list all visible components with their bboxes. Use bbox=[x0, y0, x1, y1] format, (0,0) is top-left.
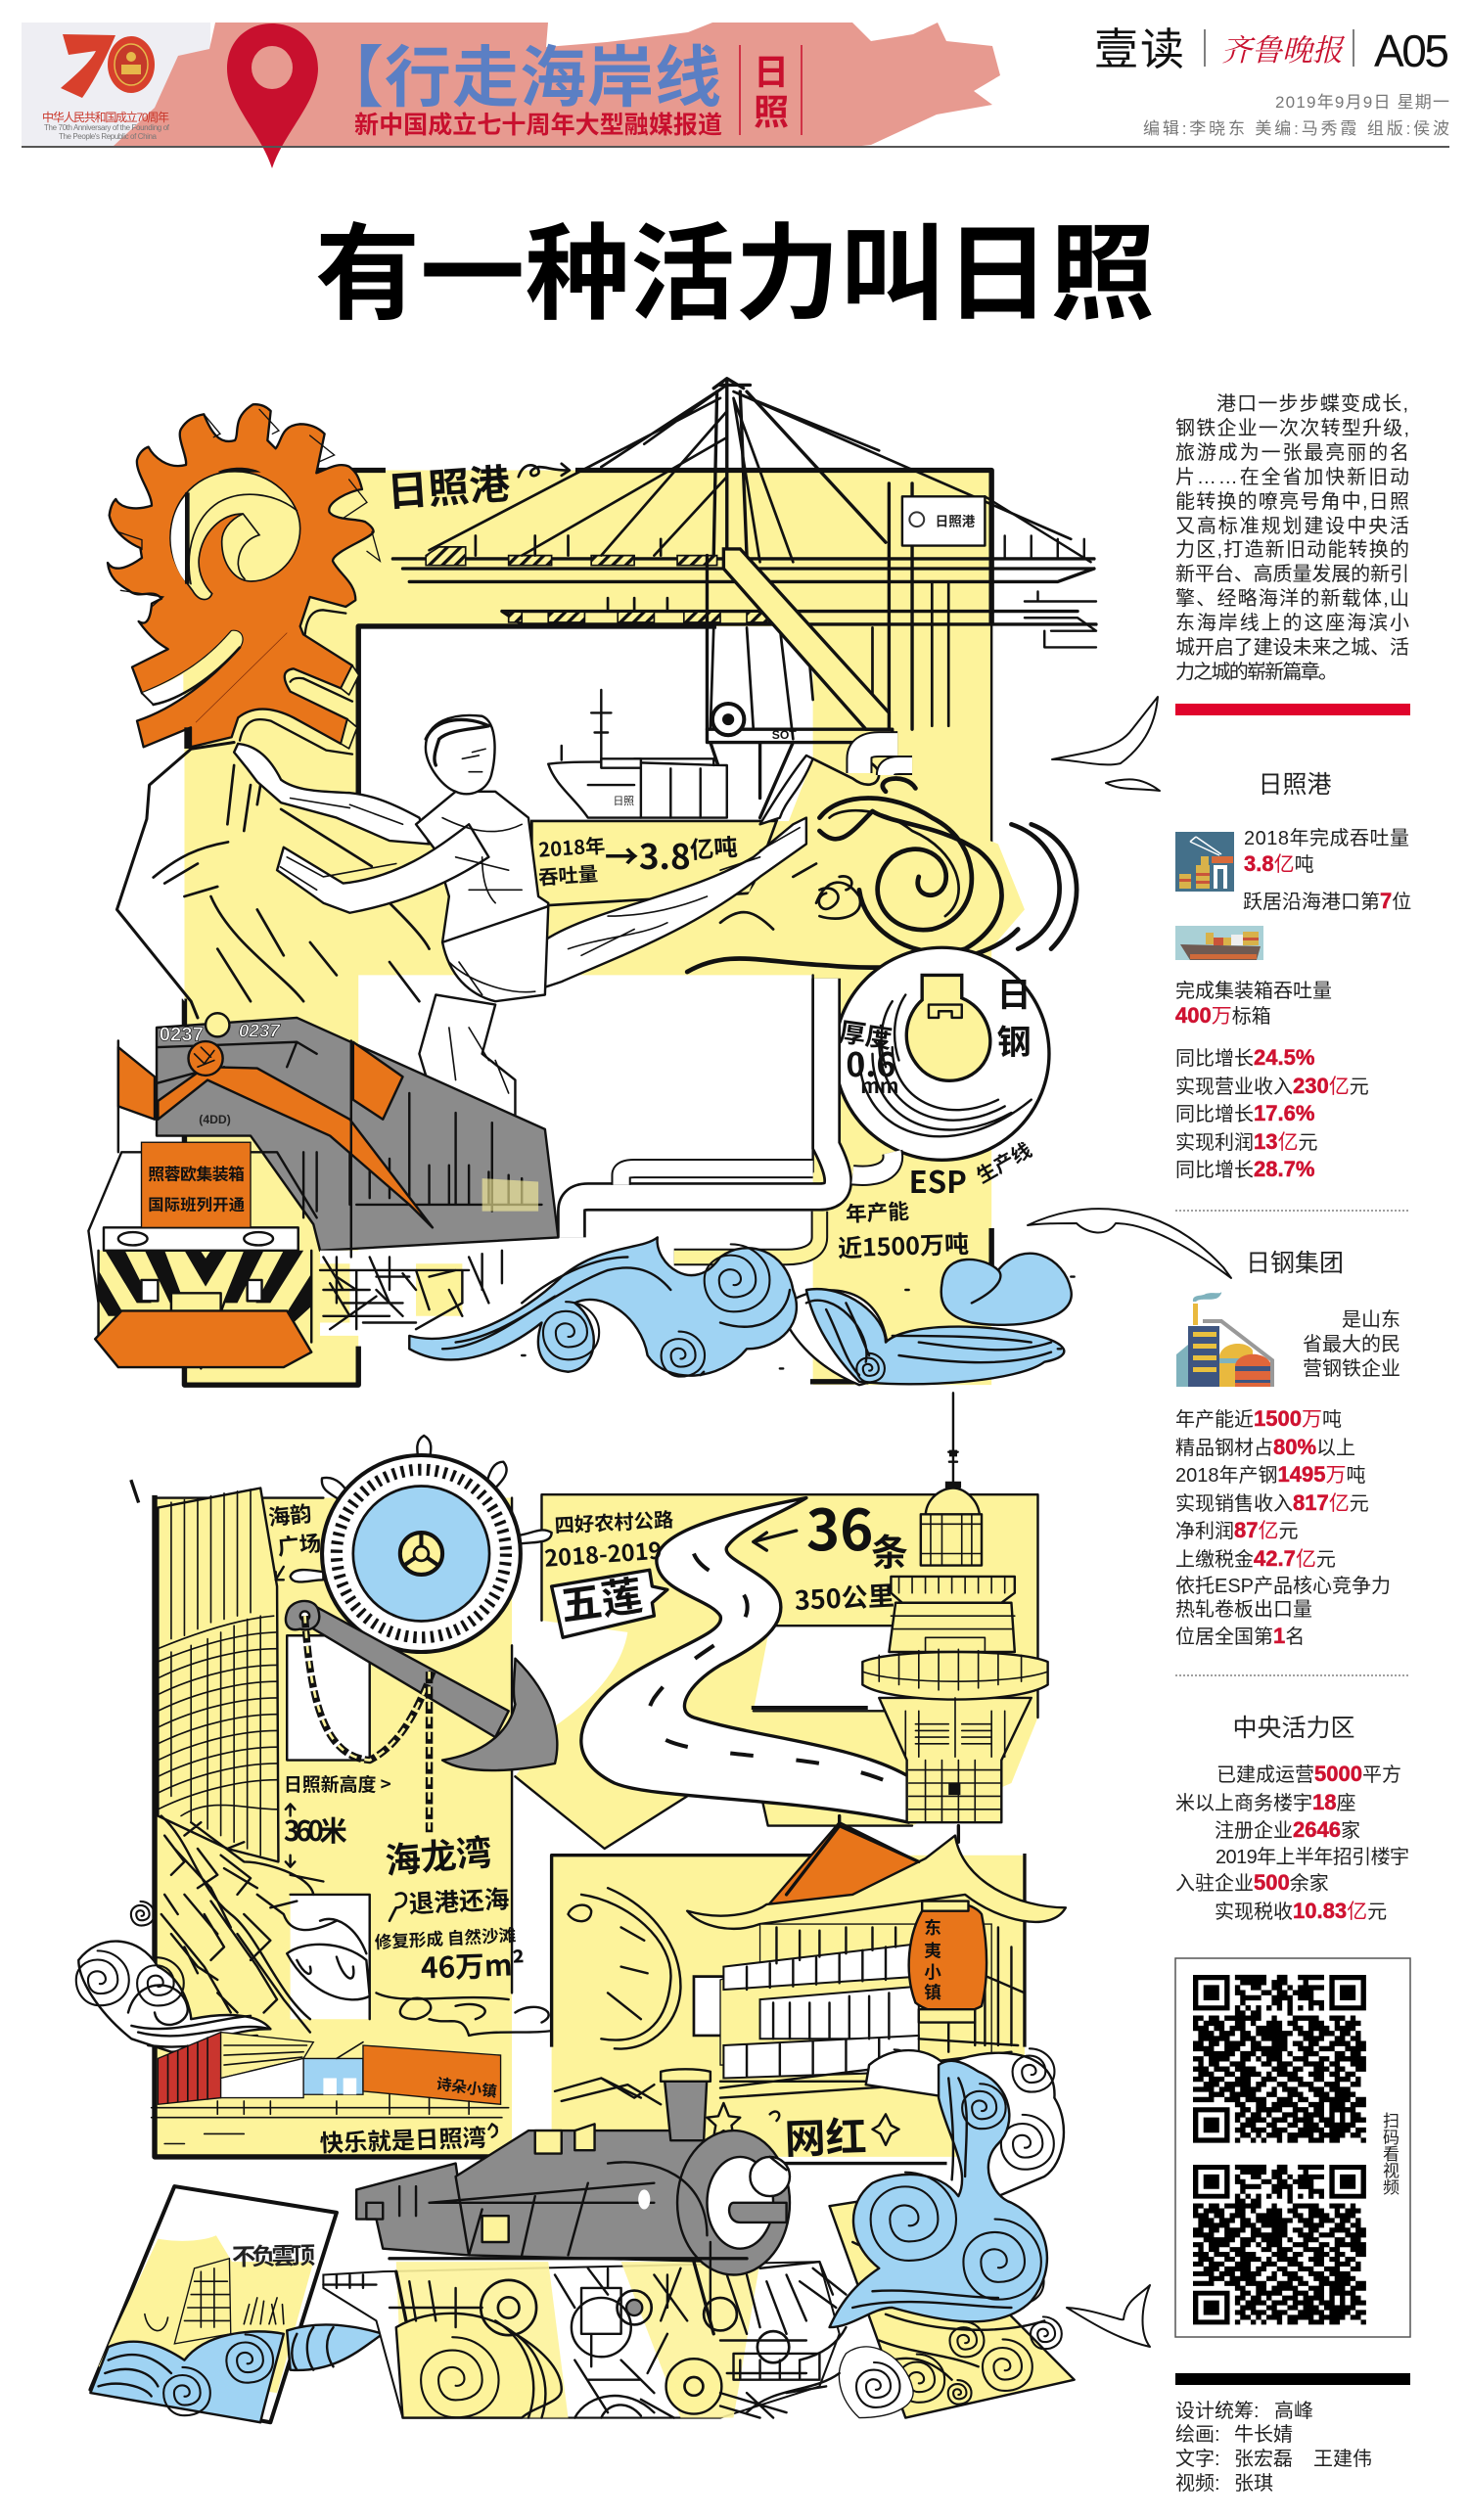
port crane: SOT bbox=[772, 728, 797, 742]
tall tower bbox=[158, 1488, 278, 1861]
road text: 条 bbox=[871, 1523, 908, 1577]
left cloth bbox=[116, 743, 430, 1018]
freight locomotive: 0237 bbox=[239, 1020, 281, 1040]
net-famous label bbox=[707, 2103, 899, 2166]
road text: 350公里 bbox=[794, 1575, 895, 1618]
date and editors bbox=[1143, 93, 1449, 138]
section: Rizhao Steel: 是山东 bbox=[1342, 1308, 1400, 1331]
section: Rizhao Port: 跃居沿海港口第7位 bbox=[1243, 889, 1411, 913]
white pipelines bbox=[572, 745, 912, 1257]
icon: steel factory bbox=[1176, 1292, 1272, 1387]
anchor bbox=[286, 1601, 557, 1832]
intro paragraph: 旅游成为一张最亮丽的名 bbox=[1175, 441, 1409, 464]
main title: 有一种活力叫日照 bbox=[315, 215, 1155, 333]
ESP line labels: 近1500万吨 bbox=[837, 1225, 970, 1264]
red lantern: 东 bbox=[924, 1915, 941, 1940]
section: Rizhao Port bbox=[1175, 771, 1411, 1181]
section: Central Vitality Zone: 入驻企业500余家 bbox=[1175, 1870, 1329, 1895]
winding road bbox=[581, 1498, 909, 1822]
masthead banner bbox=[22, 23, 1449, 168]
section: Central Vitality Zone: 已建成运营5000平方 bbox=[1216, 1762, 1401, 1786]
poster bbox=[90, 2186, 383, 2422]
map pin bbox=[227, 23, 318, 168]
heading: 日照港 bbox=[1258, 771, 1332, 799]
red lantern: 小 bbox=[924, 1960, 941, 1985]
port logo sign bbox=[902, 496, 985, 546]
port throughput label: 2018年 bbox=[537, 830, 606, 863]
yellow 日 frame bbox=[184, 470, 991, 1385]
intro paragraph: 擎、经略海洋的新载体,山 bbox=[1175, 587, 1409, 610]
scan caption: 扫 bbox=[1383, 2112, 1399, 2131]
yellow road frame bbox=[515, 1494, 1037, 1849]
credits: 王建伟 bbox=[1313, 2448, 1372, 2470]
hand lettering left: 快乐就是日照湾 bbox=[319, 2119, 486, 2159]
intro paragraph: 钢铁企业一次次转型升级, bbox=[1175, 417, 1409, 439]
port crane bbox=[392, 379, 1096, 818]
hand lettering left: 46万m² bbox=[420, 1942, 526, 1988]
gear lower yellow bands bbox=[142, 631, 243, 705]
intro paragraph: 力区,打造新旧动能转换的 bbox=[1175, 538, 1409, 561]
intro paragraph: 力之城的崭新篇章。 bbox=[1175, 661, 1338, 683]
hand lettering left: 修复形成 自然沙滩 bbox=[374, 1922, 517, 1954]
ESP line labels: 年产能 bbox=[845, 1195, 910, 1228]
section: Rizhao Port: 400万标箱 bbox=[1175, 1003, 1271, 1028]
seagull birds upper bbox=[1028, 697, 1231, 1278]
yellow right frame bbox=[552, 1856, 1025, 2164]
white scroll waves left bbox=[76, 1901, 270, 2052]
section: Rizhao Steel: 省最大的民 bbox=[1303, 1333, 1400, 1355]
place tag bbox=[740, 45, 802, 135]
date and editors: 2019年9月9日 星期一 bbox=[1275, 93, 1449, 112]
place tag: 照 bbox=[754, 92, 789, 132]
red divider bbox=[1175, 704, 1410, 715]
hand lettering left: 广场 bbox=[276, 1526, 322, 1562]
road text bbox=[543, 1485, 908, 1618]
gear inner swirl bbox=[170, 472, 300, 600]
section: Rizhao Steel: 年产能近1500万吨 bbox=[1175, 1406, 1342, 1431]
section: Rizhao Port: 完成集装箱吞吐量 bbox=[1175, 980, 1332, 1002]
freight locomotive: 0237 bbox=[160, 1024, 204, 1045]
wheels and running gear bbox=[323, 2262, 833, 2418]
steam locomotive bbox=[323, 2069, 840, 2418]
coil of steel: 厚度 bbox=[837, 1011, 895, 1056]
intro paragraph: 又高标准规划建设中央活 bbox=[1175, 515, 1409, 537]
credits: 设计统筹: bbox=[1175, 2400, 1260, 2422]
port throughput label bbox=[531, 821, 776, 906]
coil of steel: 日 bbox=[997, 968, 1032, 1018]
section: Rizhao Port: 同比增长24.5% bbox=[1175, 1045, 1314, 1070]
credits: 文字: bbox=[1175, 2448, 1220, 2470]
credits: 绘画: bbox=[1175, 2423, 1220, 2446]
credits: 牛长婧 bbox=[1234, 2423, 1293, 2446]
pavilion bbox=[687, 1816, 1066, 2098]
section: Rizhao Steel: 2018年产钢1495万吨 bbox=[1175, 1462, 1365, 1487]
ESP line labels: ESP bbox=[909, 1158, 967, 1202]
section: Rizhao Steel: 上缴税金42.7亿元 bbox=[1175, 1546, 1336, 1571]
70th anniversary logo bbox=[42, 34, 170, 141]
section: Central Vitality Zone bbox=[1175, 1715, 1409, 1923]
road text: 2018-2019 bbox=[543, 1533, 663, 1574]
hand lettering left: 日照新高度 > bbox=[284, 1770, 391, 1797]
yellow left frame bbox=[131, 1482, 512, 2157]
illustration: lower 照 panel bbox=[76, 1393, 1075, 2422]
orange plow bbox=[95, 1310, 311, 1367]
banner subtitle: 新中国成立七十周年大型融媒报道 bbox=[354, 112, 722, 139]
intro paragraph: 城开启了建设未来之城、活 bbox=[1175, 636, 1409, 659]
intro paragraph bbox=[1175, 392, 1409, 683]
section: Rizhao Steel: 精品钢材占80%以上 bbox=[1175, 1435, 1355, 1459]
coil of steel bbox=[835, 947, 1049, 1160]
QR code 2 bbox=[1193, 2165, 1366, 2324]
section: Rizhao Steel: 热轧卷板出口量 bbox=[1175, 1598, 1312, 1621]
sash and flags bbox=[118, 1040, 433, 1257]
section: Central Vitality Zone: 2019年上半年招引楼宇 bbox=[1216, 1846, 1409, 1868]
section: Rizhao Steel: 营钢铁企业 bbox=[1303, 1357, 1400, 1380]
poster: 不负雲顶 bbox=[232, 2236, 315, 2271]
black bar bbox=[1175, 2373, 1410, 2385]
lighthouse tower bbox=[862, 1393, 1048, 1822]
paper identity: 齐鲁晚报 bbox=[1221, 33, 1346, 68]
section: Rizhao Steel: 位居全国第1名 bbox=[1175, 1624, 1305, 1648]
port throughput label: 亿吨 bbox=[689, 828, 739, 865]
scan caption: 视 bbox=[1383, 2162, 1399, 2180]
coastline sketch bbox=[161, 1816, 562, 2036]
freight locomotive: (4DD) bbox=[199, 1113, 231, 1126]
section: Central Vitality Zone: 实现税收10.83亿元 bbox=[1215, 1899, 1387, 1923]
credits: 张宏磊 bbox=[1234, 2448, 1293, 2470]
port throughput label: →3.8 bbox=[605, 830, 691, 880]
intro paragraph: 新平台、高质量发展的新引 bbox=[1175, 563, 1409, 585]
banner title: 【行走海岸线 bbox=[317, 41, 721, 115]
striped front bbox=[88, 1152, 317, 1368]
right patterned poster bbox=[830, 2196, 1075, 2418]
hand lettering left: 海韵 bbox=[266, 1496, 313, 1533]
port throughput label: 吞吐量 bbox=[537, 858, 599, 891]
hand lettering left bbox=[266, 1496, 526, 2159]
ESP line labels: 生产线 bbox=[970, 1134, 1036, 1189]
red lantern bbox=[909, 1901, 986, 2052]
paper identity: 壹读 bbox=[1094, 24, 1184, 74]
70th anniversary logo: 中华人民共和国成立70周年 bbox=[42, 110, 169, 124]
heading: 日钢集团 bbox=[1246, 1250, 1344, 1277]
section: Rizhao Port: 3.8亿吨 bbox=[1244, 851, 1314, 876]
paper identity bbox=[1094, 24, 1449, 76]
intro paragraph: 能转换的嘹亮号角中,日照 bbox=[1175, 490, 1409, 513]
hand lettering left: 360米 bbox=[284, 1810, 347, 1850]
small shore waves bbox=[574, 2373, 840, 2418]
scan caption bbox=[1383, 2112, 1399, 2197]
icon: container crane bbox=[1175, 832, 1234, 892]
section: Rizhao Port: 同比增长28.7% bbox=[1175, 1157, 1314, 1181]
icon: container ship bbox=[1175, 926, 1263, 960]
scan caption: 频 bbox=[1383, 2178, 1399, 2197]
muscular figure bbox=[234, 715, 806, 1116]
red lantern: 镇 bbox=[924, 1980, 941, 2004]
golden wave swirl bbox=[687, 756, 1077, 972]
70th anniversary logo: The People's Republic of China bbox=[59, 132, 158, 141]
section: Rizhao Steel: 净利润87亿元 bbox=[1175, 1518, 1298, 1542]
section: Rizhao Steel: 实现销售收入817亿元 bbox=[1175, 1490, 1369, 1515]
intro paragraph: 港口一步步蝶变成长, bbox=[1216, 392, 1408, 415]
pink map shape bbox=[113, 23, 1000, 147]
ship wheel bbox=[291, 1436, 552, 1652]
seaside buildings bbox=[152, 2033, 509, 2143]
coil of steel: 0.6 bbox=[846, 1038, 895, 1086]
place tag: 日 bbox=[754, 52, 789, 92]
intro paragraph: 东海岸线上的这座海滨小 bbox=[1175, 612, 1409, 634]
hand lettering left: 退港还海 bbox=[408, 1880, 510, 1921]
ship bbox=[548, 690, 727, 818]
section: Rizhao Port: 同比增长17.6% bbox=[1175, 1101, 1314, 1125]
QR code 1 bbox=[1193, 1975, 1366, 2143]
QR code box bbox=[1175, 1958, 1410, 2337]
net-famous label: 网红 bbox=[784, 2105, 867, 2166]
undercarriage bbox=[320, 1251, 548, 1336]
red lantern: 夷 bbox=[924, 1939, 941, 1963]
credits: 视频: bbox=[1175, 2472, 1220, 2495]
port logo sign: 日照港 bbox=[936, 515, 976, 528]
section: Rizhao Port: 2018年完成吞吐量 bbox=[1244, 827, 1409, 849]
section: Rizhao Port: 实现营业收入230亿元 bbox=[1175, 1074, 1369, 1098]
credits: 高峰 bbox=[1274, 2400, 1313, 2422]
scan caption: 看 bbox=[1383, 2145, 1399, 2164]
seaside buildings: 诗朵小镇 bbox=[436, 2072, 498, 2102]
credits bbox=[1175, 2400, 1372, 2495]
intro paragraph: 片……在全省加快新旧动 bbox=[1175, 466, 1409, 488]
section: Rizhao Port: 实现利润13亿元 bbox=[1175, 1129, 1317, 1154]
road text: 36 bbox=[806, 1485, 873, 1567]
scan caption: 码 bbox=[1383, 2129, 1399, 2147]
hand lettering left: 海龙湾 bbox=[383, 1824, 494, 1884]
section: Central Vitality Zone: 注册企业2646家 bbox=[1215, 1817, 1360, 1842]
blue ornate waves bbox=[800, 2048, 1064, 2418]
train banner: 国际班列开通 bbox=[148, 1191, 245, 1214]
blue waves bbox=[409, 1237, 1075, 1385]
illustration: upper 日 panel bbox=[88, 379, 1096, 1385]
speech bubble 五莲: 五莲 bbox=[557, 1564, 646, 1633]
date and editors: 编辑:李晓东 美编:马秀霞 组版:侯波 bbox=[1143, 119, 1449, 138]
coil of steel: mm bbox=[860, 1071, 898, 1099]
ship: 日照 bbox=[613, 796, 634, 807]
section: Rizhao Steel: 依托ESP产品核心竞争力 bbox=[1175, 1575, 1391, 1597]
credits: 张琪 bbox=[1234, 2472, 1273, 2495]
heading: 中央活力区 bbox=[1232, 1715, 1355, 1742]
train banner: 照蓉欧集装箱 bbox=[148, 1161, 245, 1184]
freight locomotive bbox=[88, 1013, 558, 1368]
seagull lower bbox=[1067, 2285, 1150, 2347]
70th anniversary logo: The 70th Anniversary of the Founding of bbox=[44, 123, 170, 132]
gear emblem bbox=[108, 404, 380, 755]
paper identity: A05 bbox=[1374, 25, 1449, 76]
heading: 日照港: 日照港 bbox=[385, 452, 512, 519]
banner left emblem panel background bbox=[22, 23, 210, 147]
section: Central Vitality Zone: 米以上商务楼宇18座 bbox=[1175, 1790, 1355, 1814]
road text: 四好农村公路 bbox=[554, 1504, 674, 1538]
section: Rizhao Steel bbox=[1175, 1250, 1400, 1648]
coil of steel: 钢 bbox=[997, 1015, 1032, 1065]
ESP line labels bbox=[837, 1134, 1036, 1264]
train banner bbox=[141, 1142, 251, 1227]
